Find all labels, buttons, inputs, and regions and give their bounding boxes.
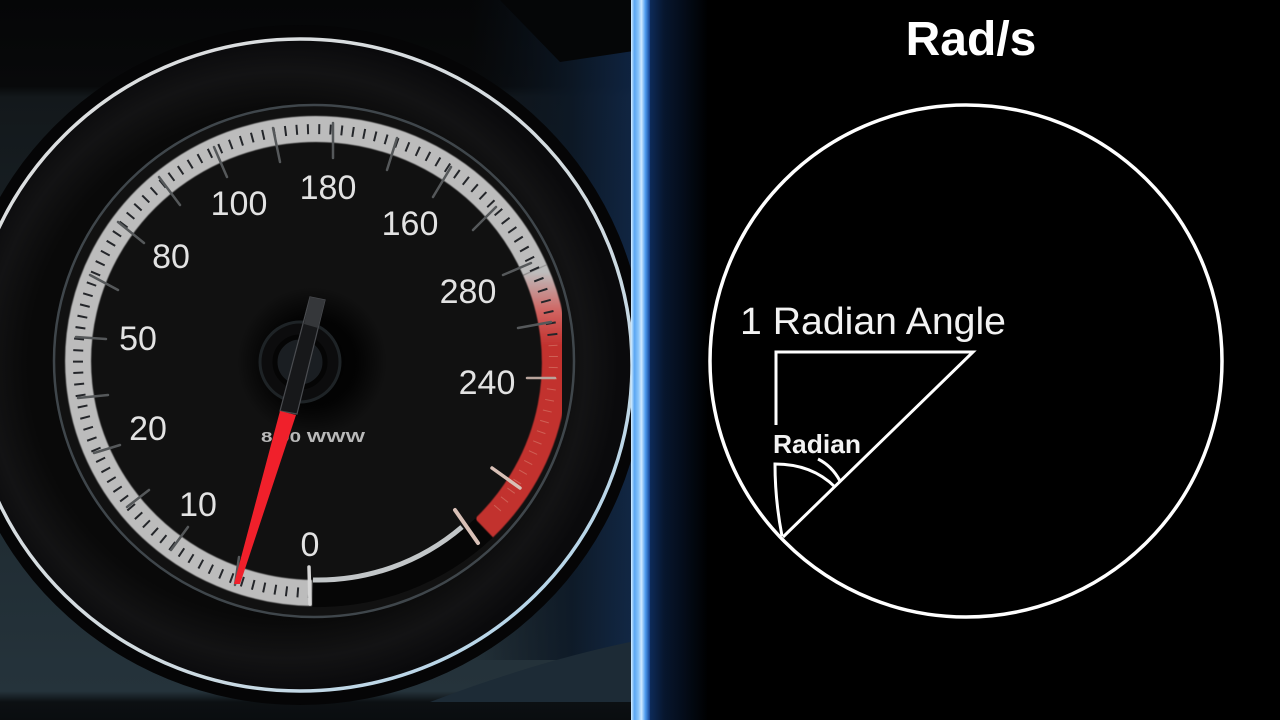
hub shadow (237, 287, 387, 437)
black gap under the scale (312, 528, 484, 594)
arc tick mark (818, 459, 840, 481)
hub (260, 322, 340, 402)
scale band: silver (78, 129, 535, 593)
major ticks (76, 123, 555, 604)
gauge numbers: 0 (301, 526, 319, 564)
unit label: 8 00 WWW (261, 429, 366, 446)
scale band: red zone (484, 270, 555, 528)
gauge numbers: 20 (129, 410, 167, 448)
glowing separator line (631, 0, 650, 720)
unit circle (710, 105, 1222, 617)
gauge numbers: 240 (459, 364, 515, 402)
gauge numbers: 80 (152, 238, 190, 276)
gauge numbers: 180 (300, 169, 356, 207)
gauge numbers: 100 (211, 185, 267, 223)
angle label: 1 Radian Angle (740, 301, 1006, 343)
gauge outer rim (0, 25, 645, 705)
thin inner arc (313, 527, 462, 580)
gauge face (54, 105, 574, 617)
gauge numbers (119, 169, 515, 564)
gauge numbers: 10 (179, 486, 217, 524)
heading: Rad/s (906, 13, 1036, 66)
radian arc (775, 464, 835, 536)
gauge numbers: 280 (440, 273, 496, 311)
radian label: Radian (773, 429, 861, 459)
separator glow right (640, 0, 720, 720)
triangle lines (776, 352, 973, 537)
needle (234, 297, 325, 584)
panel: right background (640, 0, 1280, 720)
radian diagram (710, 105, 1222, 617)
gauge numbers: 160 (382, 205, 438, 243)
gauge numbers: 50 (119, 320, 157, 358)
panel: speedometer (0, 25, 645, 705)
panel: dashboard background (0, 0, 640, 720)
scale minor ticks (78, 129, 553, 593)
scale minor ticks: red zone (494, 345, 553, 512)
